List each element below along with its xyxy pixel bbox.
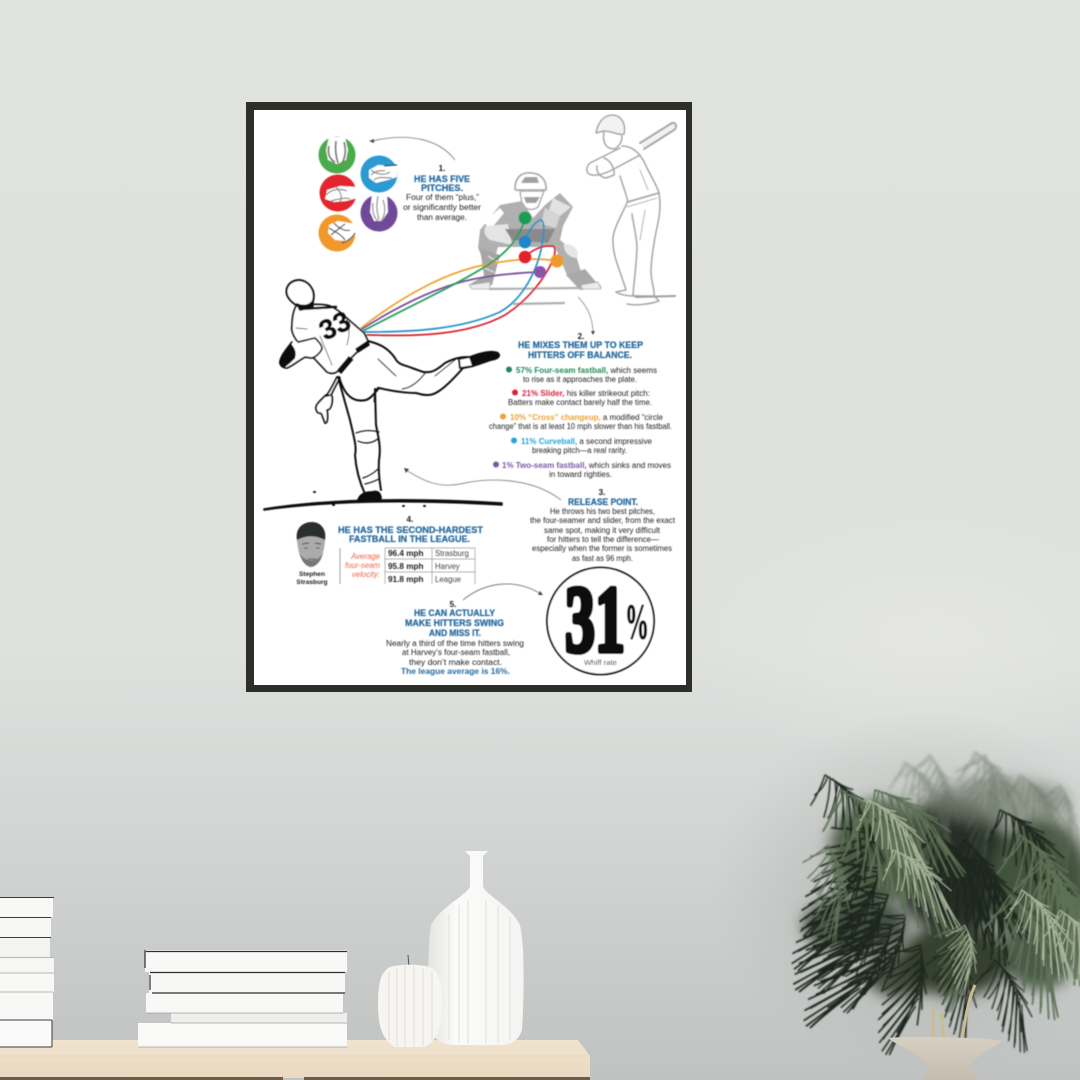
whiff rate badge: 31	[565, 568, 625, 672]
velocity table: 91.8 mph	[388, 575, 424, 584]
slider item: 21% Slider, his killer strikeout pitch:	[522, 389, 650, 398]
poster paper	[254, 110, 686, 685]
text block 5: swing and miss: 5.	[450, 599, 456, 609]
arrowheads	[369, 139, 595, 595]
upper misty fronds	[882, 747, 1080, 874]
changeup item	[489, 413, 672, 431]
text block 3: release point: same spot, making it very difficult	[544, 526, 661, 535]
curveball item: breaking pitch—a real rarity.	[532, 446, 627, 455]
icon: green grip	[318, 136, 356, 174]
icon: blue grip	[360, 156, 398, 192]
four-seam item	[506, 366, 657, 384]
icon: red grip	[320, 174, 358, 212]
slider item: Batters make contact barely half the time.	[508, 398, 652, 407]
text block 5: swing and miss: Nearly a third of the time hitters swing	[386, 639, 524, 648]
mid-green fronds	[778, 771, 1080, 1030]
text block 3: release point: He throws his two best pitches,	[550, 507, 655, 516]
velocity label: four-seam	[345, 561, 380, 570]
velocity table: Strasburg	[435, 549, 469, 558]
text block 1: five pitches: or significantly better	[403, 203, 481, 212]
white ribbed apple	[378, 955, 442, 1047]
white bottle vase	[428, 851, 524, 1045]
pitch grip icons	[318, 136, 398, 252]
icon: purple grip	[360, 194, 398, 232]
arrow 1	[372, 137, 455, 160]
shelf	[0, 1040, 590, 1078]
text block 3: release point: RELEASE POINT.	[568, 497, 638, 507]
catcher illustration	[469, 173, 602, 304]
arrow 3	[406, 470, 561, 500]
plant stems	[933, 985, 975, 1040]
text block 1: five pitches: than average.	[417, 213, 467, 222]
arrow 2	[578, 297, 593, 333]
trailing leg	[368, 341, 468, 372]
text block 3: release point	[530, 487, 676, 563]
text block 5: swing and miss: AND MISS IT.	[429, 628, 481, 638]
head	[286, 280, 314, 307]
text block 1: five pitches: Four of them “plus,”	[406, 193, 479, 202]
text block 2: pitch mix	[489, 331, 672, 479]
jersey number 33: 33	[314, 305, 355, 346]
dark fronds	[764, 771, 1073, 1056]
icon: orange grip	[318, 214, 356, 252]
text block 1: five pitches: 1.	[438, 163, 446, 173]
text block 2: pitch mix: 2.	[578, 331, 584, 341]
text block 5: swing and miss	[386, 599, 524, 676]
plant shadow on wall	[710, 710, 1080, 1070]
throwing arm across body	[280, 338, 322, 368]
curveball item	[511, 437, 652, 455]
velocity table	[340, 548, 475, 584]
text block 3: release point: as fast as 96 mph.	[572, 554, 633, 563]
text block 5: swing and miss: MAKE HITTERS SWING	[405, 618, 504, 628]
slider item	[508, 389, 652, 407]
text block 3: release point: the four-seamer and slider, from the exact	[530, 516, 676, 525]
four-seam item: to rise as it approaches the plate.	[523, 375, 637, 384]
two-seam item: in toward righties.	[549, 470, 612, 479]
portrait: Stephen Strasburg: Stephen	[299, 571, 325, 578]
whiff rate badge: %	[625, 593, 649, 649]
torso	[292, 304, 368, 373]
velocity label: Average	[350, 552, 381, 561]
text block 1: five pitches: PITCHES.	[421, 183, 463, 193]
text block 3: release point: 3.	[598, 487, 606, 497]
foliage dark mass	[803, 778, 1080, 997]
text block 3: release point: for hitters to tell the difference—	[547, 535, 659, 544]
middle book stack	[138, 950, 347, 1047]
two-seam item: 1% Two-seam fastball, which sinks and moves	[502, 461, 671, 470]
orange changeup path	[361, 259, 557, 328]
text block 1: five pitches	[403, 163, 481, 222]
text block 4: second-hardest fastball: FASTBALL IN THE LEAGUE.	[349, 534, 470, 544]
blue curveball path	[365, 220, 544, 332]
green four-seam path	[363, 218, 525, 331]
purple two-seam path	[362, 272, 540, 329]
velocity table: League	[435, 575, 461, 584]
standing leg	[338, 377, 365, 494]
curveball item: 11% Curveball, a second impressive	[521, 437, 652, 446]
batter illustration	[587, 115, 676, 305]
wall light patch	[690, 510, 1080, 770]
text block 2: pitch mix: HE MIXES THEM UP TO KEEP	[518, 340, 643, 350]
pale highlight fronds	[852, 791, 1080, 996]
portrait: Stephen Strasburg	[296, 522, 328, 586]
velocity table: 95.8 mph	[388, 562, 424, 571]
plant	[710, 710, 1080, 1080]
text block 5: swing and miss: The league average is 16%.	[401, 667, 510, 676]
velocity label	[345, 552, 381, 579]
pitch trajectories	[361, 218, 557, 335]
velocity table: Harvey	[435, 562, 460, 571]
belt	[338, 341, 369, 373]
pitcher illustration	[264, 280, 502, 510]
text block 5: swing and miss: at Harvey’s four-seam fastball,	[402, 648, 510, 657]
dangling hand	[316, 377, 340, 423]
text block 2: pitch mix: HITTERS OFF BALANCE.	[528, 350, 632, 360]
text block 5: swing and miss: they don’t make contact.	[409, 658, 502, 667]
text block 5: swing and miss: HE CAN ACTUALLY	[414, 608, 495, 618]
whiff rate badge: Whiff rate	[584, 658, 617, 667]
velocity table: 96.4 mph	[388, 549, 424, 558]
text block 4: second-hardest fastball: 4.	[406, 514, 414, 524]
arrow 5	[463, 584, 541, 600]
pitch location dots	[518, 212, 564, 278]
mound	[264, 500, 502, 510]
four-seam item: 57% Four-seam fastball, which seems	[516, 366, 657, 375]
two-seam item	[493, 461, 671, 479]
velocity label: velocity:	[352, 570, 380, 579]
changeup item: 10% “Cross” changeup, a modified “circle	[510, 413, 663, 422]
poster frame	[246, 102, 692, 692]
left book stack	[0, 897, 54, 1047]
text block 1: five pitches: HE HAS FIVE	[414, 174, 470, 184]
text block 4: second-hardest fastball: HE HAS THE SECOND-HARDEST	[338, 525, 484, 535]
plant pot	[888, 1037, 1002, 1080]
changeup item: change” that is at least 10 mph slower than his fastball.	[489, 422, 672, 431]
text block 4: second-hardest fastball	[338, 514, 484, 544]
red slider path	[367, 246, 555, 335]
portrait: Stephen Strasburg: Strasburg	[296, 579, 328, 586]
poster	[246, 102, 692, 692]
text block 3: release point: especially when the former is sometimes	[532, 544, 672, 553]
